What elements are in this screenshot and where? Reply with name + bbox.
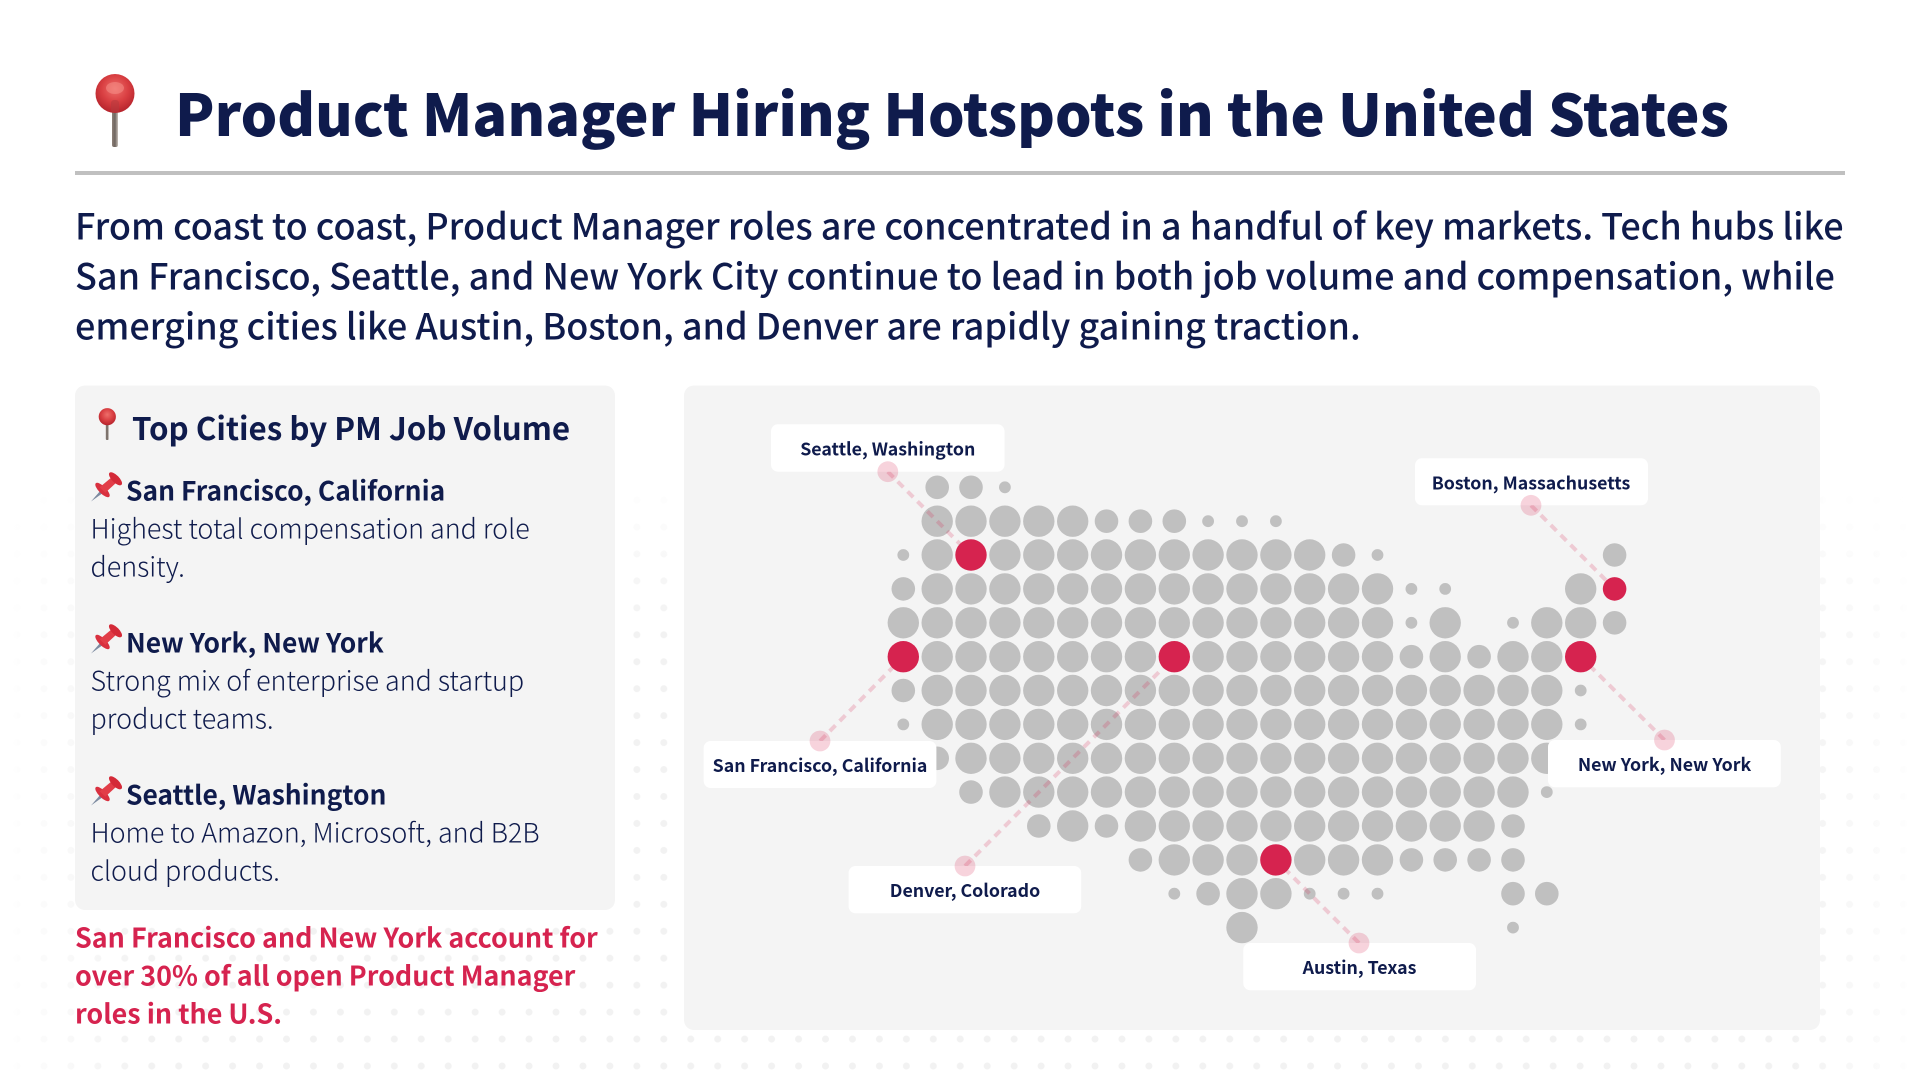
callout: market share: roles in the U.S.	[75, 992, 282, 1032]
label: Austin	[1243, 933, 1476, 990]
intro paragraph: From coast to coast, Product Manager roles are concentrated in a handful of key markets. Tech hubs like	[75, 198, 1844, 250]
city: San Francisco: density.	[90, 546, 185, 584]
label: Boston: Boston, Massachusetts	[1432, 470, 1631, 496]
label: Denver: Denver, Colorado	[890, 877, 1040, 903]
label: New York	[1548, 730, 1781, 787]
title: Product Manager Hiring Hotspots in the United States	[175, 69, 1729, 153]
label: San Francisco	[704, 731, 936, 788]
title divider	[75, 171, 1845, 175]
label: New York: New York, New York	[1578, 751, 1751, 777]
icon: pushpin	[91, 622, 124, 654]
hotspot markers	[888, 539, 1626, 876]
callout: market share: San Francisco and New York account for	[75, 916, 598, 956]
city: Seattle: cloud products.	[90, 850, 280, 888]
intro paragraph: San Francisco, Seattle, and New York City continue to lead in both job volume and compensation, while	[75, 248, 1835, 300]
panel: dot map	[684, 386, 1820, 1030]
city: Seattle: Home to Amazon, Microsoft, and B2B	[90, 812, 540, 850]
label: Seattle	[771, 424, 1004, 482]
icon: pushpin	[91, 470, 124, 502]
city: San Francisco: San Francisco, California	[126, 470, 445, 508]
callout: market share	[75, 916, 598, 1032]
icon: pushpin	[91, 774, 124, 806]
icon: title round pin	[96, 74, 134, 147]
label: Austin: Austin, Texas	[1302, 954, 1417, 980]
callout: market share: over 30% of all open Product Manager	[75, 954, 576, 994]
city: New York: product teams.	[90, 698, 274, 736]
city: New York	[90, 622, 524, 736]
panel heading: Top Cities by PM Job Volume	[132, 405, 570, 450]
label: Boston	[1415, 458, 1648, 516]
intro paragraph: emerging cities like Austin, Boston, and Denver are rapidly gaining traction.	[75, 298, 1361, 350]
intro paragraph	[75, 198, 1844, 350]
city: San Francisco	[90, 470, 530, 584]
dot grid map of the United States	[888, 476, 1626, 943]
icon: panel heading pin	[99, 408, 116, 440]
city: Seattle	[90, 774, 540, 888]
label: Denver	[849, 856, 1081, 913]
city: New York: New York, New York	[126, 622, 384, 660]
panel: top cities	[75, 386, 615, 910]
label: Seattle: Seattle, Washington	[800, 436, 975, 462]
city: Seattle: Seattle, Washington	[126, 774, 386, 812]
city: San Francisco: Highest total compensation and role	[90, 508, 530, 546]
city: New York: Strong mix of enterprise and startup	[90, 660, 524, 698]
dashed connector lines	[820, 472, 1664, 943]
label: San Francisco: San Francisco, California	[713, 752, 927, 778]
background dot pattern	[0, 480, 1920, 1080]
